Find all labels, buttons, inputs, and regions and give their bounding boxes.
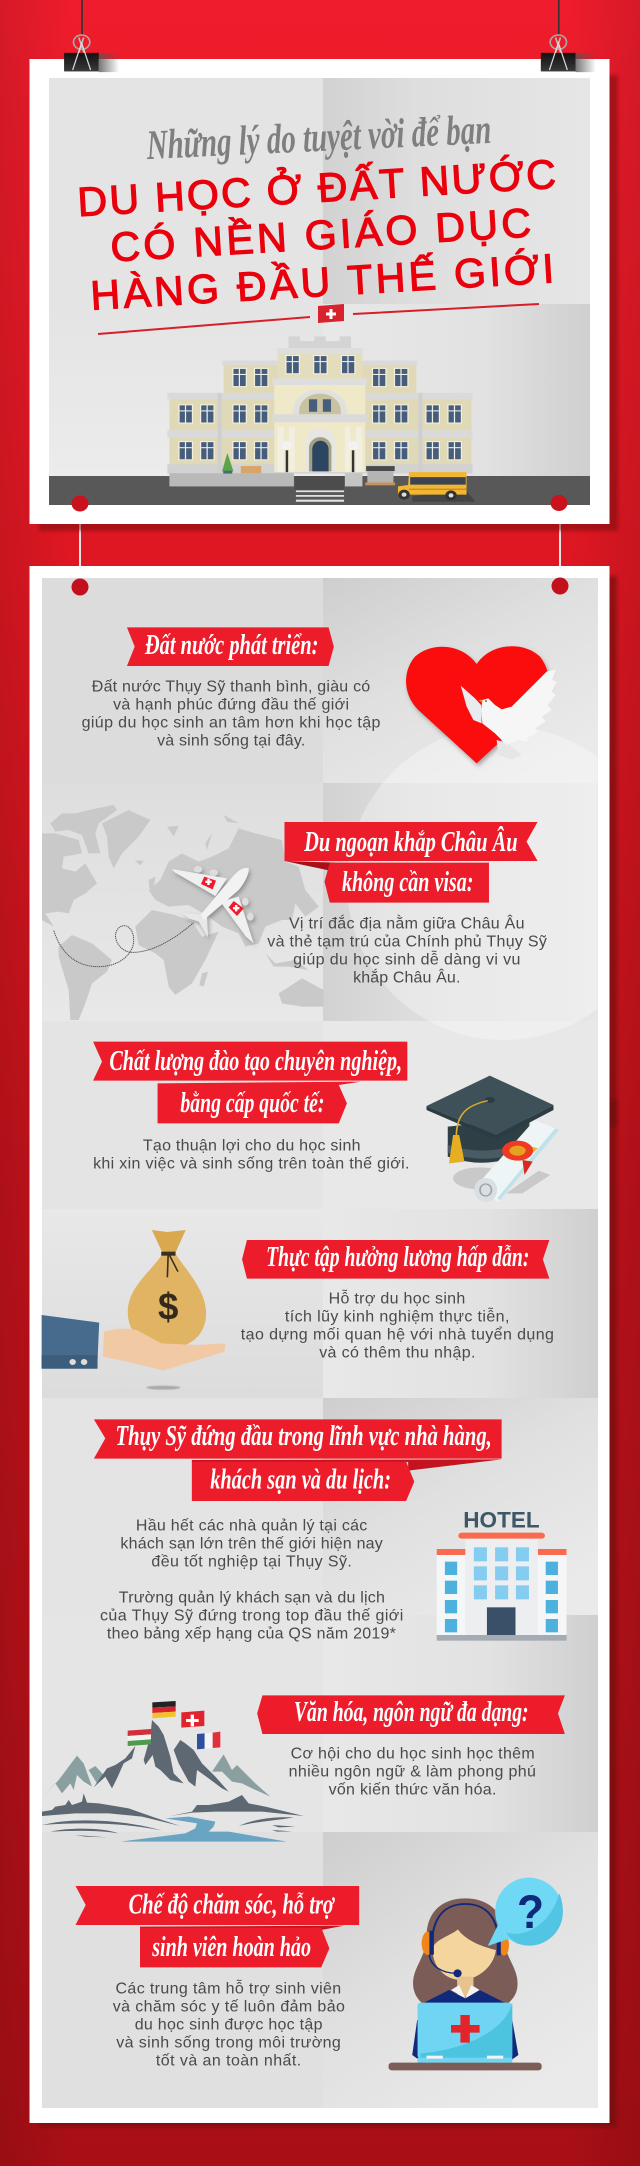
section 5: ribbon heading: Thụy Sỹ đứng đầu trong lĩnh vực nhà hàng, — [116, 1420, 492, 1452]
section 1: body text: Đất nước Thụy Sỹ thanh bình, giàu có — [92, 679, 370, 696]
underline with Swiss flag — [98, 304, 539, 334]
section 2: ribbon heading — [284, 822, 538, 903]
section 4: body text — [241, 1289, 554, 1362]
section 3: body text: khi xin việc và sinh sống trên toàn thế giới. — [93, 1155, 409, 1172]
section 2: body text: khắp Châu Âu. — [353, 967, 460, 986]
title: main heading — [76, 151, 557, 319]
section 3: body text: Tạo thuận lợi cho du học sinh — [143, 1137, 360, 1154]
section 3: ribbon heading: Chất lượng đào tạo chuyên nghiệp, — [109, 1045, 402, 1077]
section 2: body text — [267, 913, 547, 986]
section 4: ribbon heading — [242, 1240, 549, 1279]
title: main heading: HÀNG ĐẦU THẾ GIỚI — [89, 245, 555, 319]
icon: money bag on hand: $ — [158, 1285, 179, 1328]
section 7: ribbon heading: Chế độ chăm sóc, hỗ trợ — [129, 1888, 335, 1920]
section 5: ribbon heading: khách sạn và du lịch: — [210, 1463, 391, 1495]
section 2: ribbon heading: không cần visa: — [342, 866, 473, 898]
section 1: body text: và sinh sống tại đây. — [157, 733, 305, 750]
strings and pins linking posters — [79, 503, 561, 583]
section 1: body text: và hạnh phúc đứng đầu thế giới — [113, 697, 349, 714]
section 6: body text: vốn kiến thức văn hóa. — [329, 1781, 496, 1798]
section 2: body text: và thẻ tạm trú của Chính phủ Thụy Sỹ — [267, 933, 547, 950]
icon: binder clip left — [64, 0, 119, 72]
illustration: school building — [167, 336, 476, 502]
icon: hotel: HOTEL — [463, 1507, 540, 1532]
section 5: body text — [100, 1517, 403, 1642]
section 7: body text: tốt và an toàn nhất. — [156, 2053, 301, 2070]
section 2: ribbon heading: Du ngoạn khắp Châu Âu — [303, 825, 518, 858]
title: main heading: DU HỌC Ở ĐẤT NƯỚC — [76, 151, 557, 225]
section 1: body text — [82, 679, 380, 750]
section 5: body text: theo bảng xếp hạng của QS năm 2019* — [107, 1625, 396, 1642]
section 4: body text: tạo dựng mối quan hệ với nhà tuyển dụng — [241, 1326, 554, 1344]
section 4: body text: tích lũy kinh nghiệm thực tiễn, — [285, 1307, 509, 1326]
section 6: body text: Cơ hội cho du học sinh học thêm — [291, 1745, 535, 1762]
section 5: ribbon heading — [94, 1419, 502, 1501]
section 5: body text: khách sạn lớn trên thế giới hiện nay — [120, 1535, 383, 1552]
section 7: body text: Các trung tâm hỗ trợ sinh viên — [116, 1979, 341, 1998]
section 5: body text: Hầu hết các nhà quản lý tại các — [136, 1517, 367, 1534]
section 7: body text: và chăm sóc y tế luôn đảm bảo — [113, 1999, 345, 2016]
icon: money bag on hand — [42, 1230, 225, 1390]
section 7: ribbon heading: sinh viên hoàn hảo — [152, 1931, 311, 1963]
panel: top poster — [30, 59, 618, 531]
section 5: body text: của Thụy Sỹ đứng trong top đầu thế giới — [100, 1607, 403, 1624]
road — [49, 476, 590, 505]
icon: hotel — [437, 1507, 567, 1641]
section 3: ribbon heading: bằng cấp quốc tế: — [180, 1087, 324, 1119]
section 7: body text: và sinh sống trong môi trường — [116, 2035, 341, 2052]
section 3: ribbon heading — [93, 1042, 407, 1123]
icon: pins — [72, 495, 568, 596]
section 1: body text: giúp du học sinh an tâm hơn khi học tập — [82, 715, 380, 732]
icon: graduation cap and diploma — [427, 1076, 559, 1202]
section 1: ribbon heading: Đất nước phát triển: — [144, 629, 318, 661]
panel: bottom poster — [30, 566, 617, 2127]
section 6: body text — [289, 1745, 536, 1798]
section 4: body text: và có thêm thu nhập. — [319, 1345, 476, 1362]
section 4: body text: Hỗ trợ du học sinh — [329, 1289, 465, 1308]
section 6: ribbon heading — [257, 1695, 565, 1734]
section 7: body text — [113, 1979, 345, 2070]
section 1: ribbon heading — [127, 627, 334, 666]
icon: heart with dove — [406, 646, 557, 763]
section 6: ribbon heading: Văn hóa, ngôn ngữ đa dạng: — [294, 1696, 529, 1728]
section 7: ribbon heading — [76, 1886, 359, 1967]
section 2: world map with plane — [42, 805, 324, 1020]
section 6: mountains with flags — [42, 1701, 304, 1842]
section 3: body text — [93, 1137, 409, 1172]
section 5: body text: đều tốt nghiệp tại Thụy Sỹ. — [151, 1553, 352, 1570]
icon: support operator — [389, 1878, 563, 2070]
icon: binder clip right — [541, 0, 596, 72]
section 5: body text: Trường quản lý khách sạn và du lịch — [119, 1589, 385, 1606]
title: script subtitle: Những lý do tuyệt vời để bạn — [145, 107, 492, 169]
section 2: body text: giúp du học sinh dễ dàng vi vu — [293, 949, 520, 968]
section backgrounds — [42, 578, 598, 2108]
section 7: body text: du học sinh được học tập — [135, 2017, 323, 2034]
section 2: body text: Vị trí đắc địa nằm giữa Châu Âu — [289, 913, 524, 932]
title: main heading: CÓ NỀN GIÁO DỤC — [109, 200, 532, 270]
icon: support operator: ? — [517, 1885, 544, 1938]
decorative light circle — [347, 726, 598, 1040]
section 6: body text: nhiều ngôn ngữ & làm phong phú — [289, 1763, 536, 1780]
